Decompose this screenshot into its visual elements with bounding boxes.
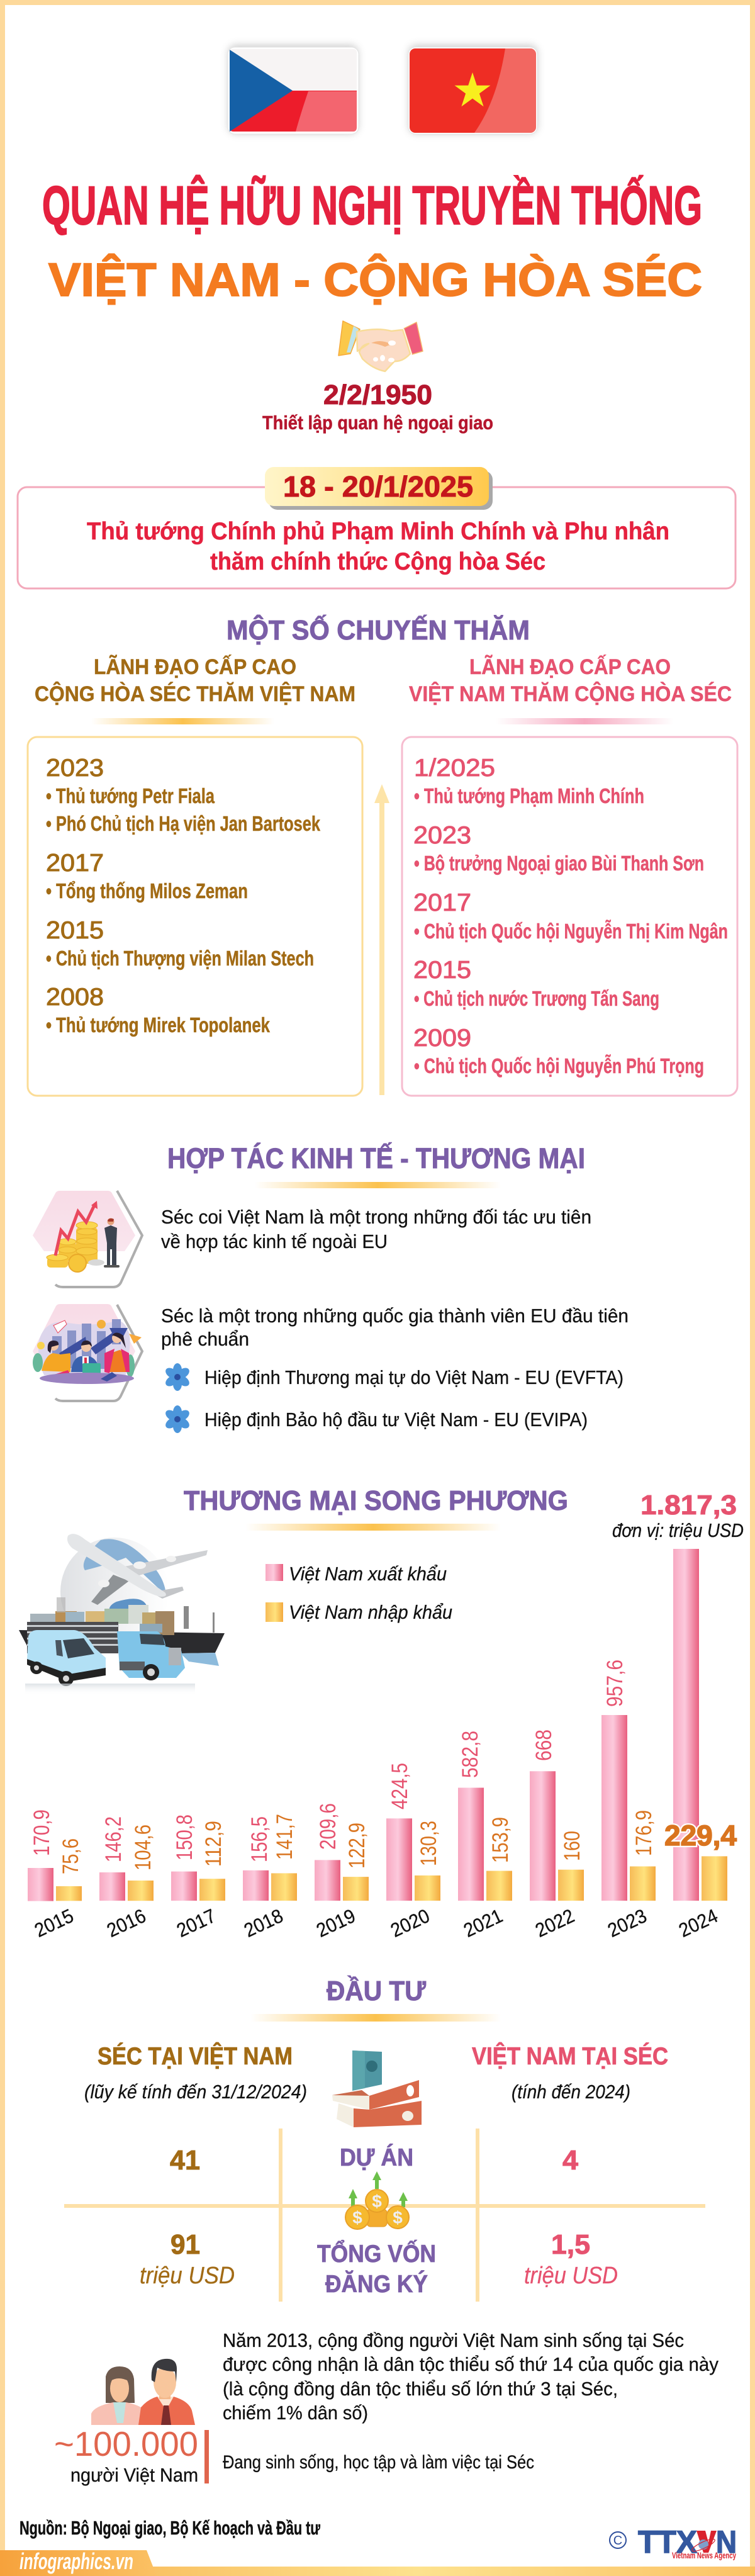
panel: visits to Czech Republic <box>402 737 737 1096</box>
text: first EU members to ratify <box>161 1305 629 1350</box>
panel: visits to Vietnam: • Tổng thống Milos Zeman <box>46 879 248 903</box>
data labels: 176,9 <box>632 1810 656 1856</box>
heading: Vietnamese leaders visiting Czech Republic: VIỆT NAM THĂM CỘNG HÒA SÉC <box>409 682 732 706</box>
bar chart: bilateral trade 2015-2024: 2016 <box>103 1904 149 1942</box>
icon: Vietnamese couple <box>91 2359 195 2425</box>
data labels: 130,3 <box>417 1821 441 1866</box>
footer band: infographics.vn <box>20 2548 133 2574</box>
text: community recognition: (là cộng đồng dân tộc thiểu số lớn thứ 3 tại Séc, <box>223 2378 618 2400</box>
icon: binders <box>332 2050 422 2127</box>
data labels: 153,9 <box>488 1817 513 1863</box>
bar chart: bilateral trade 2015-2024: 2021 <box>460 1904 506 1942</box>
data labels: 104,6 <box>131 1825 155 1870</box>
icon: coins and growth chart <box>33 1191 142 1287</box>
illustration: plane, ship and trucks <box>19 1534 225 1695</box>
text: community recognition: được công nhận là dân tộc thiểu số thứ 14 của quốc gia này <box>223 2353 719 2375</box>
bar chart: bilateral trade 2015-2024: 229,4 <box>664 1820 737 1852</box>
bar chart: bilateral trade 2015-2024: 2022 <box>532 1904 578 1942</box>
heading: Czech leaders visiting Vietnam: CỘNG HÒA SÉC THĂM VIỆT NAM <box>35 682 355 706</box>
panel: visits to Czech Republic: 2017 <box>413 889 471 916</box>
text: community recognition: chiếm 1% dân số) <box>223 2402 368 2424</box>
column: Vietnam in Czech Republic: (tính đến 2024) <box>512 2081 630 2103</box>
panel: official visit: 18 - 20/1/2025 <box>283 470 473 503</box>
chart unit <box>612 1490 744 1541</box>
logo: TTXVN: TTX <box>638 2524 697 2560</box>
data labels <box>30 1660 656 1874</box>
text: first EU members to ratify: phê chuẩn <box>161 1328 249 1350</box>
panel: official visit: Thủ tướng Chính phủ Phạm Minh Chính và Phu nhân <box>87 518 669 545</box>
heading: investment <box>250 1975 501 2022</box>
icon: coins with arrows: $ <box>372 2191 382 2211</box>
stat: Vietnamese community size: người Việt Nam <box>70 2464 198 2486</box>
bar chart: bilateral trade 2015-2024: 2018 <box>240 1904 286 1942</box>
column: Czech in Vietnam: triệu USD <box>140 2263 235 2289</box>
data labels: 957,6 <box>603 1660 627 1707</box>
heading: Vietnamese leaders visiting Czech Republic <box>409 655 732 724</box>
text: priority partner: Séc coi Việt Nam là một trong những đối tác ưu tiên <box>161 1206 591 1228</box>
icon: handshake <box>338 321 423 371</box>
panel: visits to Vietnam: 2008 <box>46 984 104 1011</box>
column: Vietnam in Czech Republic: 4 <box>562 2145 579 2176</box>
legend <box>266 1563 452 1623</box>
footer band <box>0 2548 755 2576</box>
heading: economic and trade cooperation <box>167 1142 585 1188</box>
bar chart: bilateral trade 2015-2024: 2017 <box>173 1904 219 1942</box>
date of diplomatic ties: Thiết lập quan hệ ngoại giao <box>262 412 493 434</box>
panel: visits to Czech Republic: • Chủ tịch nước Trương Tấn Sang <box>414 987 659 1010</box>
icon: coins with arrows: $ <box>393 2208 403 2227</box>
panel: visits to Vietnam: • Phó Chủ tịch Hạ viện Jan Bartosek <box>46 812 320 835</box>
column: Vietnam in Czech Republic <box>472 2042 668 2289</box>
data labels: 150,8 <box>172 1814 197 1860</box>
panel: visits to Czech Republic: 1/2025 <box>414 755 495 782</box>
panel: visits to Czech Republic: • Thủ tướng Phạm Minh Chính <box>414 784 644 807</box>
list: EVFTA: Hiệp định Thương mại tự do Việt Nam - EU (EVFTA) <box>204 1366 624 1388</box>
stat: Vietnamese community size: ~100.000 <box>54 2424 198 2463</box>
column: Czech in Vietnam: 91 <box>171 2229 200 2260</box>
data labels: 160 <box>560 1831 584 1861</box>
text: community recognition <box>223 2329 719 2424</box>
investment table lines <box>64 2129 705 2302</box>
data labels: 122,9 <box>345 1823 369 1869</box>
bar chart: bilateral trade 2015-2024: 2024 <box>675 1904 721 1942</box>
heading: Czech leaders visiting Vietnam <box>35 655 355 724</box>
text: priority partner: về hợp tác kinh tế ngoài EU <box>161 1230 388 1252</box>
panel: visits to Vietnam: • Thủ tướng Petr Fiala <box>46 784 215 807</box>
data labels: 112,9 <box>201 1821 226 1867</box>
flag: Vietnam <box>408 45 537 134</box>
data labels: 668 <box>532 1730 556 1761</box>
panel: visits to Vietnam <box>28 737 362 1096</box>
panel: official visit <box>18 467 735 588</box>
panel: visits to Czech Republic: 2015 <box>413 957 471 984</box>
legend: Việt Nam xuất khẩu <box>289 1563 447 1585</box>
text: community recognition: Năm 2013, cộng đồng người Việt Nam sinh sống tại Séc <box>223 2329 684 2351</box>
column: Vietnam in Czech Republic: triệu USD <box>524 2263 618 2289</box>
column: Czech in Vietnam: SÉC TẠI VIỆT NAM <box>98 2042 293 2070</box>
icon: coins with arrows: $ <box>352 2208 362 2227</box>
heading: visits: MỘT SỐ CHUYẾN THĂM <box>226 614 530 646</box>
list: EVFTA <box>164 1363 624 1391</box>
panel: visits to Vietnam: 2017 <box>46 850 104 877</box>
data labels: 582,8 <box>458 1731 483 1778</box>
bar chart: bilateral trade 2015-2024: 2023 <box>604 1904 650 1942</box>
label: registered capital: ĐĂNG KÝ <box>325 2270 428 2298</box>
column: Czech in Vietnam <box>84 2042 307 2289</box>
data labels: 146,2 <box>101 1816 126 1862</box>
column: Czech in Vietnam: 41 <box>170 2145 200 2176</box>
data labels: 170,9 <box>30 1809 54 1856</box>
legend: Việt Nam nhập khẩu <box>289 1601 452 1623</box>
heading: bilateral trade <box>184 1485 568 1531</box>
data labels: 424,5 <box>388 1763 412 1809</box>
heading: bilateral trade: THƯƠNG MẠI SONG PHƯƠNG <box>184 1485 568 1516</box>
bar chart: bilateral trade 2015-2024: 2020 <box>387 1904 433 1942</box>
arrow: timeline <box>374 784 389 1095</box>
panel: visits to Czech Republic: 2023 <box>413 822 471 849</box>
label: registered capital: TỔNG VỐN <box>317 2239 436 2268</box>
column: Vietnam in Czech Republic: 1,5 <box>551 2229 590 2260</box>
panel: visits to Czech Republic: 2009 <box>413 1025 471 1052</box>
label: registered capital <box>317 2239 436 2298</box>
date of diplomatic ties: 2/2/1950 <box>323 380 432 410</box>
list: EVIPA: Hiệp định Bảo hộ đầu tư Việt Nam - EU (EVIPA) <box>204 1409 588 1431</box>
data labels: 75,6 <box>59 1838 83 1874</box>
date of diplomatic ties <box>262 380 493 434</box>
logo: TTXVN: C <box>613 2534 622 2548</box>
data labels: 141,7 <box>272 1814 297 1860</box>
logo: TTXVN <box>610 2524 737 2560</box>
text: priority partner <box>161 1206 591 1252</box>
panel: visits to Vietnam: • Chủ tịch Thượng viện Milan Stech <box>46 947 314 970</box>
icon: coins with arrows <box>345 2171 409 2229</box>
data labels: 156,5 <box>247 1816 272 1862</box>
stat: Vietnamese community size <box>54 2424 534 2486</box>
column: Vietnam in Czech Republic: VIỆT NAM TẠI SÉC <box>472 2042 668 2070</box>
bar chart: bilateral trade 2015-2024 <box>28 1549 737 1942</box>
source: Nguồn: Bộ Ngoại giao, Bộ Kế hoạch và Đầu tư <box>20 2517 320 2539</box>
title: VIỆT NAM - CỘNG HÒA SÉC <box>48 254 702 306</box>
heading: Czech leaders visiting Vietnam: LÃNH ĐẠO CẤP CAO <box>94 655 296 679</box>
title <box>42 176 702 306</box>
column: Czech in Vietnam: (lũy kế tính đến 31/12/2024) <box>84 2081 307 2103</box>
panel: official visit: thăm chính thức Cộng hòa Séc <box>210 548 545 575</box>
bar chart: bilateral trade 2015-2024: 229,4 <box>664 1820 737 1852</box>
panel: visits to Vietnam: 2015 <box>46 917 104 944</box>
panel: visits to Vietnam: • Thủ tướng Mirek Topolanek <box>46 1013 271 1037</box>
stat: Vietnamese community size: Đang sinh sống, học tập và làm việc tại Séc <box>223 2452 534 2473</box>
icon: team with growth chart <box>33 1304 142 1401</box>
heading: investment: ĐẦU TƯ <box>327 1975 426 2006</box>
data labels: 209,6 <box>316 1803 340 1850</box>
heading: Vietnamese leaders visiting Czech Republic: LÃNH ĐẠO CẤP CAO <box>469 655 671 679</box>
heading: economic and trade cooperation: HỢP TÁC KINH TẾ - THƯƠNG MẠI <box>167 1142 585 1174</box>
list: EVIPA <box>164 1405 588 1433</box>
bar chart: bilateral trade 2015-2024: 2015 <box>31 1904 77 1942</box>
panel: visits to Vietnam: 2023 <box>46 755 104 782</box>
label: projects: DỰ ÁN <box>340 2144 413 2171</box>
bar chart: bilateral trade 2015-2024: 2019 <box>313 1904 359 1942</box>
logo: TTXVN: N <box>716 2524 737 2560</box>
flag: Czech Republic <box>228 45 359 134</box>
chart unit: 1.817,3 <box>640 1490 737 1521</box>
text: first EU members to ratify: Séc là một trong những quốc gia thành viên EU đầu tiên <box>161 1305 629 1327</box>
